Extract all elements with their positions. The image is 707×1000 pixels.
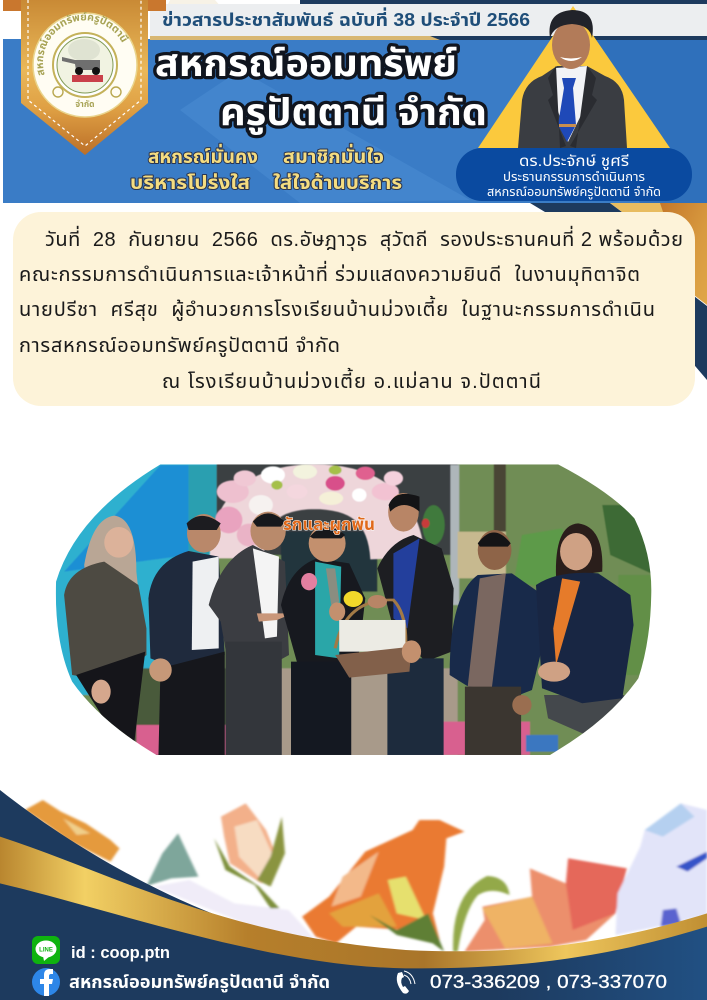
facebook name: สหกรณ์ออมทรัพย์ครูปัตตานี จำกัด	[69, 972, 330, 993]
person: center man with teal shirt	[281, 525, 365, 755]
line id: id : coop.ptn	[71, 943, 170, 962]
name pill	[456, 148, 692, 201]
flower: rose bud	[214, 803, 285, 908]
right edge ribbons	[660, 203, 707, 380]
person: man in grey suit	[209, 512, 293, 755]
flower: blue hydrangea	[615, 803, 707, 935]
stripes under banner	[530, 203, 672, 212]
person: tall man in blue polo	[377, 493, 454, 755]
group photo	[52, 462, 654, 758]
flower: pale lilac	[153, 880, 316, 940]
phone numbers: 073-336209 , 073-337070	[430, 972, 667, 992]
president portrait	[518, 10, 627, 148]
header banner	[3, 0, 707, 212]
blue band	[3, 36, 707, 203]
flower: coral petals	[464, 858, 627, 952]
seal logo	[32, 12, 138, 118]
news paragraph: นายปรีชา ศรีสุข ผู้อำนวยการโรงเรียนบ้านม่วงเตี้ย ในฐานะกรรมการดำเนิน	[19, 295, 655, 322]
title: สหกรณ์ออมทรัพย์	[155, 43, 457, 84]
person: man in patterned shirt	[450, 530, 541, 755]
icon: Facebook	[32, 968, 60, 996]
slogans: ใส่ใจด้านบริการ	[273, 172, 402, 194]
arch banner text: รักและผูกพัน	[283, 515, 375, 535]
footer	[0, 790, 707, 1000]
leaf: grey teal	[147, 833, 198, 886]
slogans	[130, 144, 402, 194]
ribbon badge	[21, 0, 148, 155]
news paragraph: คณะกรรมการดำเนินการและเจ้าหน้าที่ ร่วมแสดงความยินดี ในงานมุทิตาจิต	[19, 260, 640, 286]
name pill: สหกรณ์ออมทรัพย์ครูปัตตานี จำกัด	[487, 185, 661, 199]
basket	[335, 591, 421, 678]
panel: news text	[13, 212, 695, 406]
ribbon stubs	[3, 0, 166, 11]
seal logo: จำกัด	[75, 99, 95, 109]
news paragraph	[19, 225, 683, 393]
icon: LINE	[32, 936, 60, 964]
flower: orange lily	[302, 820, 464, 952]
issue heading: ข่าวสารประชาสัมพันธ์ ฉบับที่ 38 ประจำปี 2566	[162, 7, 530, 30]
name pill: ดร.ประจักษ์ ชูศรี	[519, 153, 629, 170]
person: woman in hijab	[64, 516, 146, 742]
person: man in navy jacket	[148, 514, 225, 755]
title	[155, 43, 487, 135]
title: ครูปัตตานี จำกัด	[220, 92, 487, 135]
gold swoosh	[0, 837, 707, 968]
stem hook	[453, 876, 510, 952]
icon: LINE: LINE	[39, 948, 53, 954]
person: woman in orange shirt	[536, 523, 634, 735]
news paragraph: การสหกรณ์ออมทรัพย์ครูปัตตานี จำกัด	[19, 335, 340, 358]
top stripes	[150, 0, 707, 40]
flower arch	[215, 464, 445, 558]
yellow triangle	[478, 6, 670, 148]
watercolor flowers	[25, 800, 707, 952]
navy swoosh	[0, 790, 707, 1000]
news paragraph: วันที่ 28 กันยายน 2566 ดร.อัษฎาวุธ สุวัตถี รองประธานคนที่ 2 พร้อมด้วย	[45, 225, 683, 251]
name pill: ประธานกรรมการดำเนินการ	[503, 170, 645, 184]
news paragraph: ณ โรงเรียนบ้านม่วงเตี้ย อ.แม่ลาน จ.ปัตตานี	[162, 367, 541, 393]
flower: orange rose	[25, 800, 119, 862]
slogans: บริหารโปร่งใส	[130, 172, 250, 194]
slogans: สมาชิกมั่นใจ	[283, 144, 384, 168]
slogans: สหกรณ์มั่นคง	[148, 144, 258, 168]
icon: phone	[397, 971, 415, 994]
photo background	[52, 462, 654, 758]
seal logo: สหกรณ์ออมทรัพย์ครูปัตตานี	[37, 12, 129, 76]
issue strip background	[150, 4, 707, 36]
